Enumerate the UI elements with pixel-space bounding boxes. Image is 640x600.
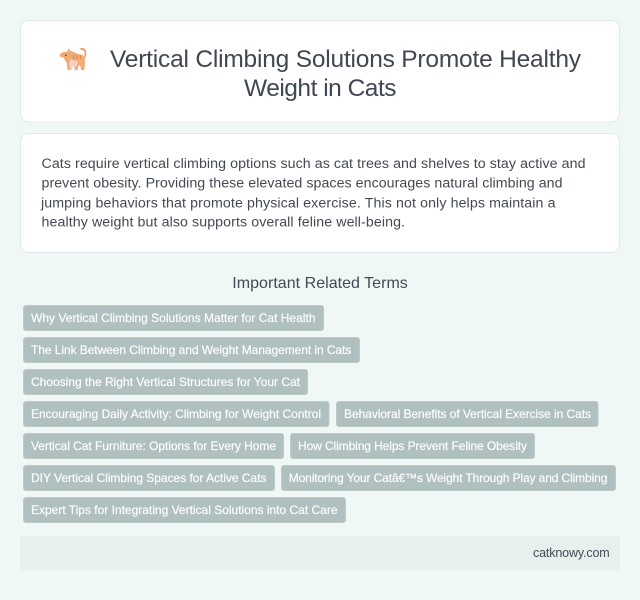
tag: Monitoring Your Catâ€™s Weight Through Play and Climbing [289,471,607,485]
title [110,46,582,102]
panel: description [20,134,620,252]
tag [336,402,598,426]
tag list [24,306,616,522]
panel: title card [20,20,620,122]
tag [24,306,324,330]
tag [24,466,274,490]
tag [24,338,360,362]
tag [24,498,346,522]
tag: Expert Tips for Integrating Vertical Solutions into Cat Care [31,503,338,517]
tag: How Climbing Helps Prevent Feline Obesity [298,439,527,453]
panel: description: Cats require vertical climbing options such as cat trees and shelves to stay active and [42,156,586,172]
tag: Choosing the Right Vertical Structures for Your Cat [31,375,301,389]
footer [20,536,620,570]
tag: Vertical Cat Furniture: Options for Every Home [31,439,276,453]
tag [24,434,284,458]
footer: catknowy.com [533,546,610,560]
tag: Why Vertical Climbing Solutions Matter for Cat Health [31,311,316,325]
tag [282,466,616,490]
title: Vertical Climbing Solutions Promote Healthy [110,46,582,73]
tag: Behavioral Benefits of Vertical Exercise in Cats [344,407,591,421]
tag [24,370,308,394]
tag [290,434,534,458]
tag [24,402,329,426]
heading: related terms: Important Related Terms [232,275,408,292]
panel: description: healthy weight but also supports overall feline well-being. [42,214,405,230]
title: Weight in Cats [244,75,396,102]
tag: DIY Vertical Climbing Spaces for Active Cats [31,471,266,485]
tag: The Link Between Climbing and Weight Management in Cats [31,343,351,357]
panel: description: prevent obesity. Providing these elevated spaces encourages natural climbing and [42,175,562,191]
panel: description: jumping behaviors that promote physical exercise. This not only helps maintain a [40,195,556,211]
icon: cat [60,48,86,70]
tag: Encouraging Daily Activity: Climbing for Weight Control [31,407,321,421]
